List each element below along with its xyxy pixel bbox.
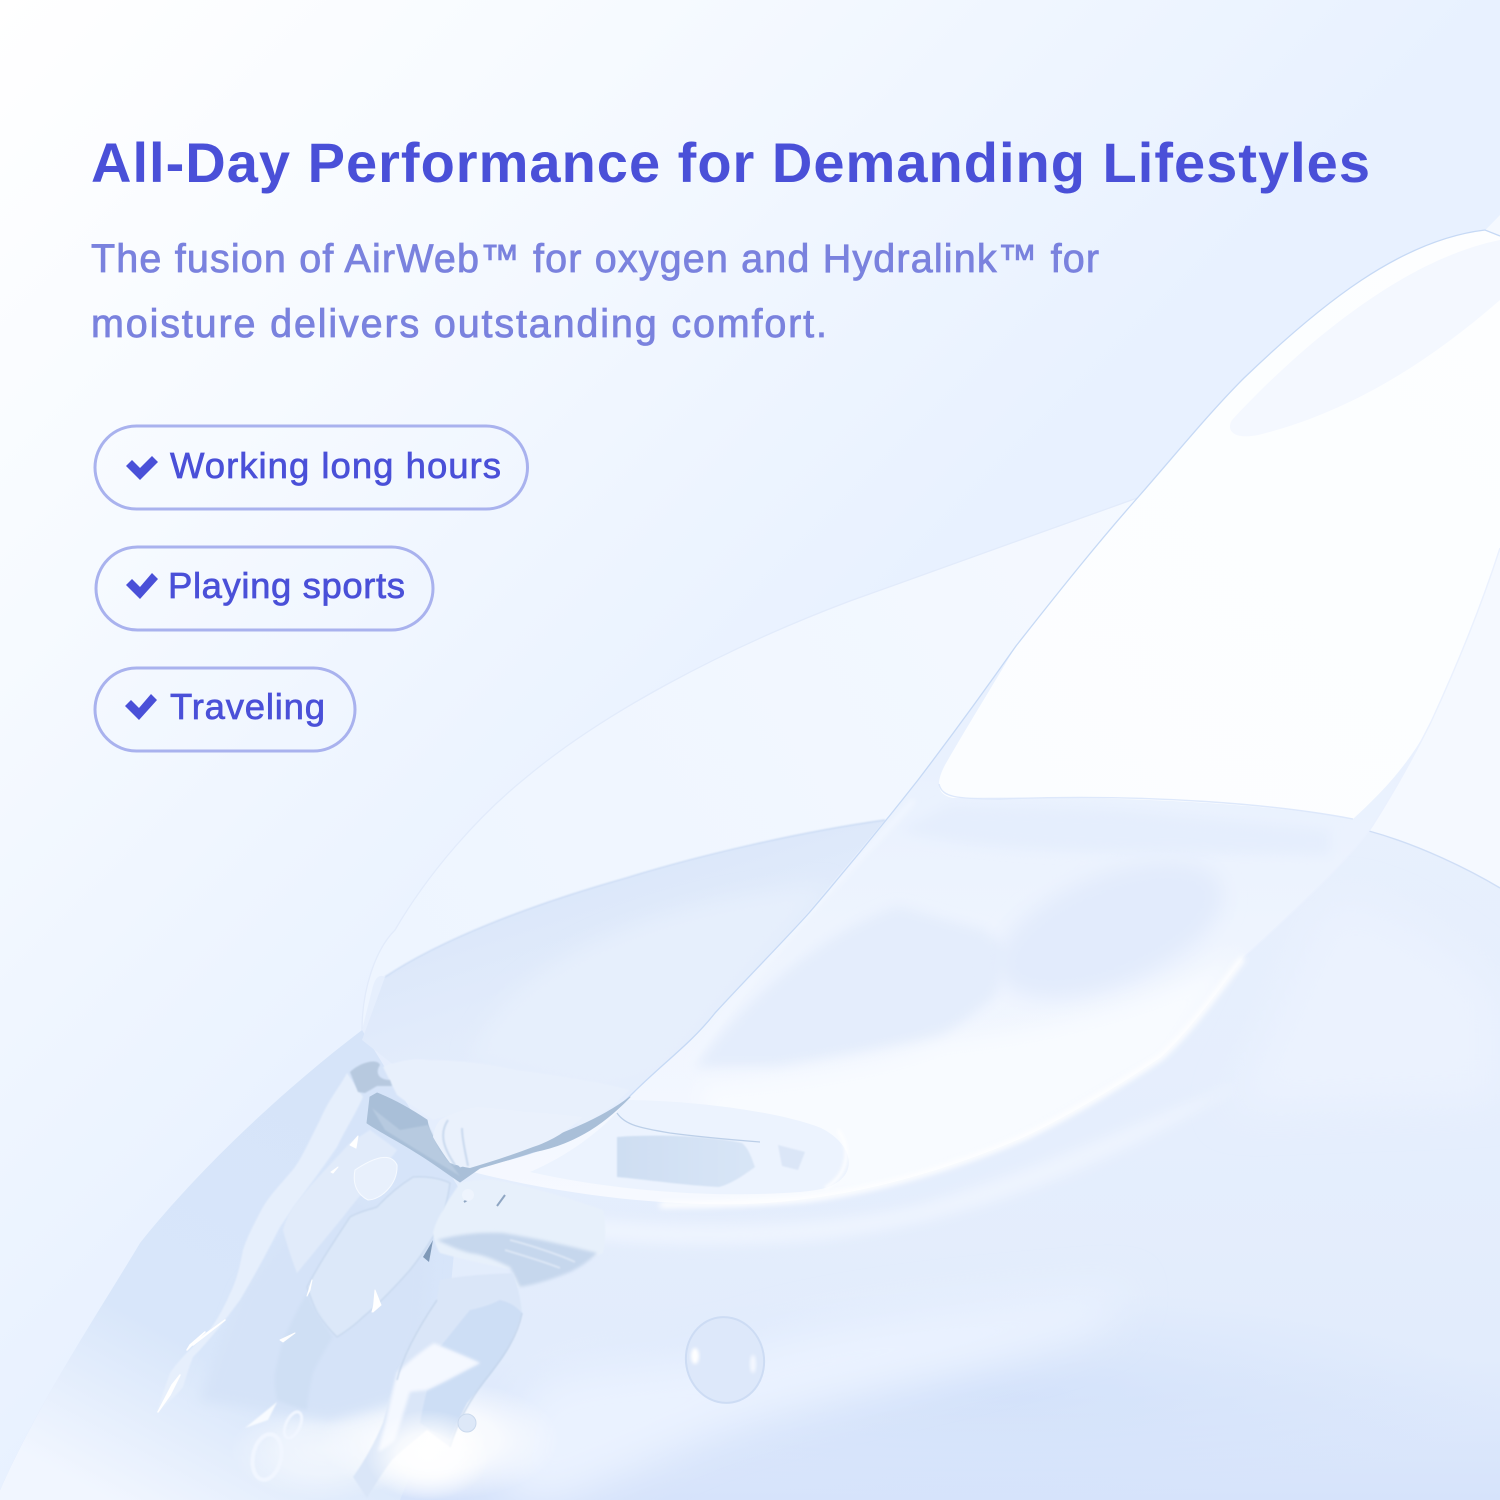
ripple band under white panel [900, 805, 1330, 855]
eye [433, 1107, 583, 1168]
pill: working long hours [95, 426, 528, 509]
soft light patch beside splash [508, 1310, 1082, 1500]
stream white highlight [378, 1343, 480, 1452]
lens outline left [465, 230, 1500, 1170]
foot shadow block [617, 1136, 755, 1187]
label: playing sports: Playing sports [168, 565, 405, 606]
subtitle [91, 237, 1099, 346]
small sparkles [280, 1136, 381, 1342]
strand highlights [158, 1320, 225, 1412]
lens central patch [704, 913, 994, 1066]
shaded area between strands [200, 1180, 430, 1420]
lens right shadow [1006, 870, 1215, 995]
icon: check [126, 456, 158, 480]
under-lens gel band [470, 1085, 1238, 1245]
stream bottom glow [365, 1410, 490, 1500]
icon: check [126, 573, 158, 599]
lens [465, 230, 1500, 1205]
lens lower translucent area [465, 230, 1500, 1204]
lens foot [530, 1100, 849, 1194]
dark accent [423, 1240, 433, 1262]
subtitle line two: moisture delivers outstanding comfort. [91, 302, 827, 346]
stream inner blue [420, 1300, 522, 1440]
white upper panel [939, 230, 1500, 819]
strand left light [157, 1073, 363, 1413]
vein second strand [372, 1108, 460, 1176]
icon: check [125, 694, 157, 720]
darker strand [275, 1293, 333, 1410]
bowl inner shade [362, 822, 884, 1048]
lump notches [464, 1195, 505, 1206]
water splash [157, 1059, 849, 1500]
bowl rim left [385, 820, 885, 977]
ring two [281, 1409, 305, 1441]
left white glow [259, 1419, 366, 1485]
label: traveling: Traveling [170, 686, 325, 727]
ring one [249, 1432, 285, 1482]
water bubble [679, 1311, 771, 1409]
stream edge line [397, 1300, 522, 1447]
lump ripples [505, 1240, 575, 1268]
bottom-left white glow [352, 1394, 532, 1490]
foot line [617, 1113, 760, 1142]
dark vein [367, 1093, 630, 1182]
upper lip of water [383, 1059, 630, 1125]
lump shade [437, 1233, 597, 1287]
lens bright lower area [1183, 1001, 1184, 1002]
right bowl light [1230, 900, 1500, 1110]
small lump bead [462, 1189, 474, 1201]
drip wedge [245, 1402, 277, 1428]
left band shade [0, 1030, 460, 1500]
upper strand bubble [354, 1157, 397, 1200]
inner left bright edge [689, 800, 914, 1062]
lower right shade [918, 1362, 1146, 1414]
lump [433, 1180, 605, 1288]
bowl rim right [1369, 831, 1500, 888]
lens bottom white rim [660, 958, 1243, 1205]
foot highlight [825, 1130, 846, 1188]
middle-left panel [283, 1130, 397, 1273]
bubble highlight right [750, 1355, 756, 1373]
bead [458, 1414, 476, 1432]
panel lower edge line [939, 784, 1353, 819]
tip top [350, 1061, 392, 1093]
lower gel body [0, 780, 1500, 1500]
title: All-Day Performance for Demanding Lifestyles [91, 131, 1370, 194]
label: working long hours: Working long hours [170, 445, 501, 486]
bubble highlight left [691, 1348, 699, 1364]
lens outline right [1243, 548, 1500, 958]
inner bowl light [470, 885, 830, 1090]
central panel [307, 1177, 450, 1337]
back film sheet [362, 215, 1500, 1100]
eye crease [443, 1120, 468, 1166]
drip rings [249, 1409, 305, 1482]
film rim [362, 497, 1140, 1030]
pill: playing sports [96, 547, 433, 630]
subtitle line one: The fusion of AirWeb™ for oxygen and Hydralink™ for [91, 237, 1099, 281]
upper inner oval [1230, 240, 1500, 436]
neck stream [353, 1273, 522, 1498]
pill: traveling [95, 668, 355, 751]
foot shadow small [778, 1145, 805, 1170]
